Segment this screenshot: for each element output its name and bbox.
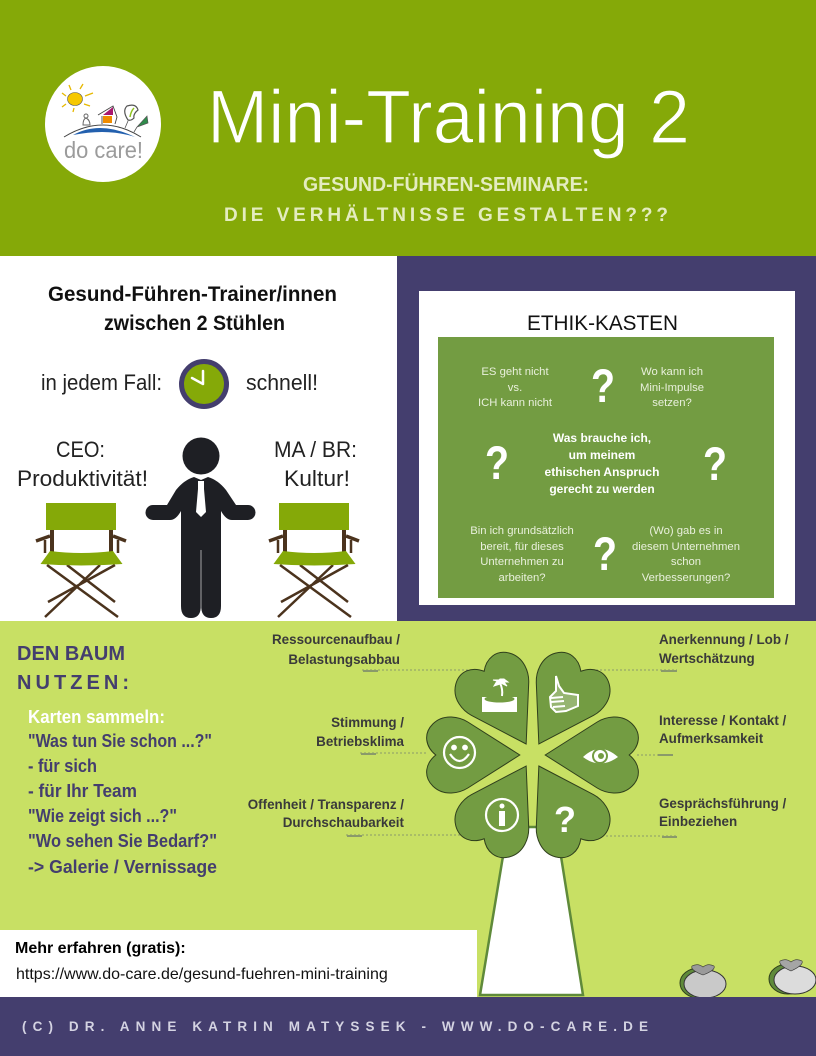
- callout: more info: Mehr erfahren (gratis):: [15, 940, 186, 957]
- text: cards list: Karten sammeln:: [28, 706, 165, 727]
- text: ES geht nicht: ICH kann nicht: [478, 397, 553, 409]
- callout: more info: https://www.do-care.de/gesund-fuehren-mini-training: [16, 966, 388, 983]
- icon: trees: [125, 105, 148, 132]
- label: CEO: CEO:: [56, 437, 105, 462]
- text: Wo gab es: [632, 525, 740, 584]
- subtitle line 2: DIE VERHÄLTNISSE GESTALTEN???: [224, 205, 668, 226]
- tree labels right: Interesse / Kontakt /: [659, 713, 787, 728]
- logo text: do care!: [64, 137, 143, 163]
- icon: hill and water: [64, 125, 141, 137]
- dotted connector lines: [346, 670, 677, 836]
- text: central question: ethischen Anspruch: [545, 465, 659, 479]
- question marks: ?: [593, 527, 617, 580]
- heading: den baum nutzen: [17, 643, 129, 694]
- icon: walking figure: [83, 114, 90, 125]
- icon: question mark: ?: [554, 799, 576, 840]
- icon: house: [98, 106, 117, 124]
- subtitle line 1: GESUND-FÜHREN-SEMINARE:: [303, 173, 589, 196]
- text: Wo kann ich: [640, 366, 704, 409]
- tree labels left: Belastungsabbau: [288, 652, 400, 667]
- ethics green card: [438, 337, 774, 598]
- text: schnell: schnell!: [246, 370, 318, 395]
- text: cards list: "Wie zeigt sich ...?": [28, 805, 177, 826]
- heading: ethik-kasten: ETHIK-KASTEN: [527, 312, 678, 335]
- icon: smiley: [444, 737, 475, 768]
- heading: trainer: [48, 283, 337, 335]
- icon: thumbs up: [550, 676, 578, 712]
- label: MA / BR: Kultur!: [284, 466, 350, 491]
- logo: [45, 66, 161, 182]
- text: Bin ich: Bin ich grundsätzlich: [470, 525, 574, 537]
- tree labels left: Durchschaubarkeit: [283, 815, 405, 830]
- text: Bin ich: [470, 525, 574, 584]
- text: ES geht nicht: vs.: [508, 382, 522, 394]
- icon: palm island: [482, 679, 517, 712]
- text: Wo gab es: Verbesserungen?: [642, 572, 730, 584]
- text: in jedem Fall: in jedem Fall:: [41, 370, 162, 395]
- text: Wo kann ich: Mini-Impulse: [640, 382, 704, 394]
- label: CEO: [17, 437, 148, 491]
- icon: info: [486, 799, 518, 831]
- header band: [0, 0, 816, 256]
- panel: tree section: [0, 621, 816, 998]
- text: Bin ich: Unternehmen zu: [480, 556, 564, 568]
- title: Mini-Training 2: [207, 75, 690, 160]
- icon: sun: [62, 84, 93, 112]
- panel: trainer between two chairs: [0, 256, 397, 621]
- label: CEO: Produktivität!: [17, 466, 148, 491]
- label: MA / BR: MA / BR:: [274, 437, 357, 462]
- question marks: ?: [591, 359, 615, 412]
- tree labels right: Wertschätzung: [659, 651, 755, 666]
- icon: right bag: [769, 960, 816, 994]
- text: cards list: "Was tun Sie schon ...?": [28, 730, 212, 751]
- icon: left chair: [36, 503, 126, 617]
- tree labels right: Gesprächsführung /: [659, 796, 787, 811]
- text: central question: gerecht zu werden: [549, 482, 655, 496]
- tree labels left: Ressourcenaufbau /: [272, 632, 400, 647]
- question marks: ?: [485, 436, 509, 489]
- text: Bin ich: arbeiten?: [498, 572, 546, 584]
- tree labels left: Offenheit / Transparenz /: [248, 797, 404, 812]
- tree labels left: [248, 632, 405, 830]
- footer: (C) DR. ANNE KATRIN MATYSSEK - WWW.DO-CARE.DE: [22, 1019, 648, 1034]
- heading: trainer: zwischen 2 Stühlen: [104, 312, 285, 335]
- heading: den baum nutzen: NUTZEN:: [17, 672, 129, 694]
- tree labels right: Anerkennung / Lob /: [659, 632, 789, 647]
- text: cards list: [28, 706, 217, 877]
- text: cards list: - für sich: [28, 755, 97, 776]
- text: Wo kann ich: Wo kann ich: [641, 366, 703, 378]
- panel: ethics box: [397, 256, 816, 621]
- icon: left bag: [680, 965, 726, 998]
- icon: tree crown: [427, 644, 638, 866]
- label: MA / BR: [274, 437, 357, 491]
- tree labels left: Betriebsklima: [316, 734, 405, 749]
- text: cards list: -> Galerie / Vernissage: [28, 856, 217, 877]
- tree labels right: [659, 632, 789, 829]
- icon: tree trunk: [480, 827, 583, 995]
- text: ES geht nicht: [478, 366, 553, 409]
- heading: den baum nutzen: DEN BAUM: [17, 643, 125, 665]
- text: Wo gab es: schon: [671, 556, 701, 568]
- heading: trainer: Gesund-Führen-Trainer/innen: [48, 283, 337, 306]
- text: cards list: - für Ihr Team: [28, 780, 137, 801]
- callout: more info: [0, 930, 477, 997]
- tree labels left: Stimmung /: [331, 715, 404, 730]
- text: Wo kann ich: setzen?: [652, 397, 692, 409]
- icon: right chair: [269, 503, 359, 617]
- tree labels right: Einbeziehen: [659, 814, 737, 829]
- footer: [0, 997, 816, 1056]
- text: central question: Was brauche ich,: [553, 431, 651, 445]
- text: ES geht nicht: ES geht nicht: [481, 366, 549, 378]
- text: Wo gab es: diesem Unternehmen: [632, 541, 740, 553]
- question marks: ?: [703, 437, 727, 490]
- text: Wo gab es: (Wo) gab es in: [649, 525, 723, 537]
- icon: person: [146, 438, 256, 618]
- text: Bin ich: bereit, für dieses: [480, 541, 564, 553]
- text: central question: um meinem: [569, 448, 635, 462]
- text: cards list: "Wo sehen Sie Bedarf?": [28, 830, 217, 851]
- icon: eye: [583, 749, 618, 764]
- icon: tie: [196, 481, 206, 517]
- text: central question: [545, 431, 659, 496]
- question marks: [485, 359, 727, 580]
- icon: clock: [182, 362, 226, 406]
- tree labels right: Aufmerksamkeit: [659, 731, 764, 746]
